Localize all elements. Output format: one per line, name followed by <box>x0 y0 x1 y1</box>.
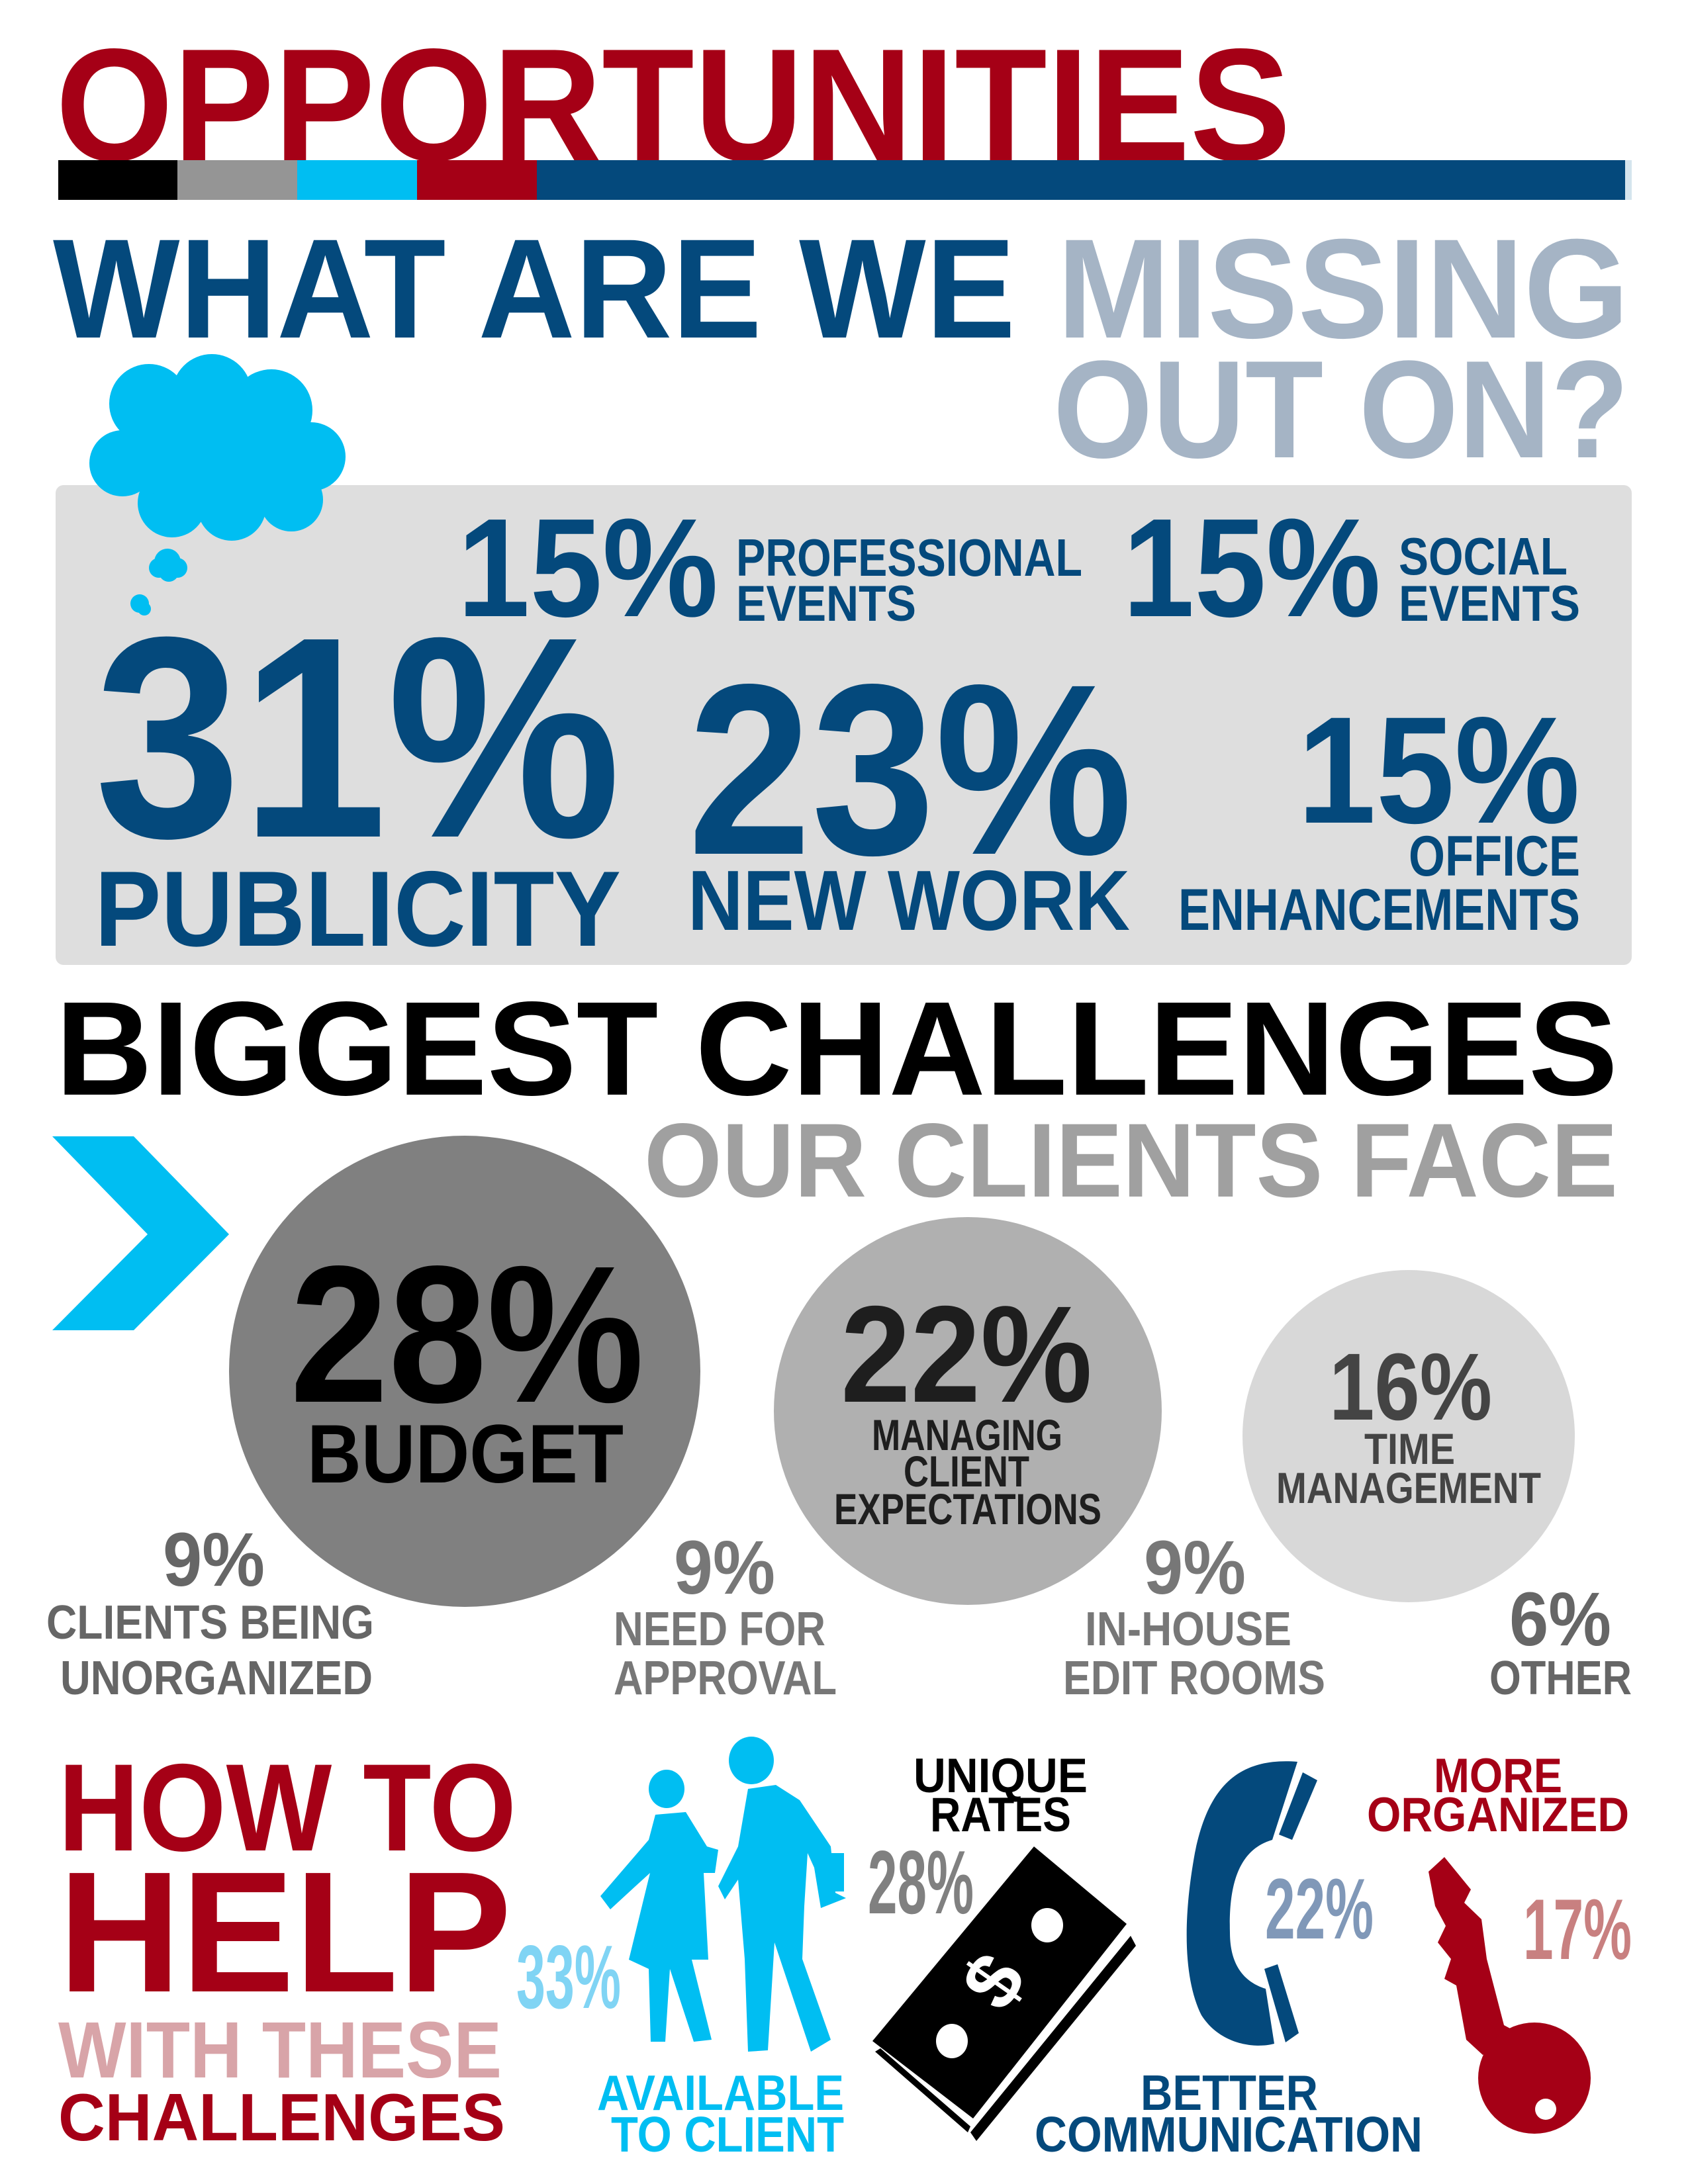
stat: 9% need for approval <box>614 1525 837 1705</box>
stat: 15% office enhancements: OFFICE <box>1409 825 1580 888</box>
stat: 9% need for approval: NEED FOR <box>614 1603 825 1656</box>
stat: 15% social events: SOCIAL <box>1399 527 1568 586</box>
stat: 15% office enhancements: 15% <box>1297 685 1580 855</box>
stat: 15% professional events: 15% <box>457 489 718 646</box>
item: better communication: 22% <box>1265 1860 1374 1957</box>
heading: how to help with these challenges: CHALLENGES <box>58 2081 505 2155</box>
stat: 6% other: OTHER <box>1489 1652 1632 1705</box>
heading: what are we missing out on <box>53 210 1629 487</box>
stat: 9% need for approval: APPROVAL <box>614 1652 837 1705</box>
bubble: 22% managing client expectations: MANAGING <box>872 1410 1062 1459</box>
icon: key <box>1429 1857 1591 2134</box>
bubble: 16% time management: MANAGEMENT <box>1276 1463 1541 1512</box>
stat: 9% in-house edit rooms: EDIT ROOMS <box>1063 1652 1325 1705</box>
stat: 9% clients being unorganized: 9% <box>163 1518 265 1602</box>
stat: 6% other: 6% <box>1509 1577 1611 1662</box>
item: unique rates: 28% <box>868 1832 974 1933</box>
bubble: 28% budget: BUDGET <box>307 1408 624 1500</box>
item: available to client: 33% <box>516 1927 621 2027</box>
bubble: 16% time management <box>1243 1270 1575 1602</box>
heading: what are we missing out on: OUT ON? <box>1053 332 1629 487</box>
stat: 15% social events: 15% <box>1123 489 1381 646</box>
icon: money bill <box>872 1846 1136 2141</box>
icon: people <box>600 1737 846 2052</box>
stat: 9% in-house edit rooms: IN-HOUSE <box>1085 1603 1291 1656</box>
heading: how to help with these challenges: HOW TO <box>58 1738 516 1877</box>
stat: 31% publicity: PUBLICITY <box>95 849 621 969</box>
heading: biggest challenges: OUR CLIENTS FACE <box>644 1101 1618 1219</box>
bubble: 22% managing client expectations <box>774 1217 1162 1605</box>
heading: how to help with these challenges <box>58 1738 516 2155</box>
bubble: 16% time management: 16% <box>1329 1334 1492 1440</box>
stat: 15% office enhancements: ENHANCEMENTS <box>1178 876 1580 942</box>
stat: 9% need for approval: 9% <box>674 1525 775 1610</box>
stat: 15% professional events <box>457 489 1082 646</box>
item: better communication <box>1035 1761 1423 2162</box>
item: unique rates: RATES <box>930 1788 1071 1842</box>
item: unique rates: UNIQUE <box>914 1749 1088 1803</box>
stat: 15% social events: EVENTS <box>1399 576 1580 632</box>
heading: what are we missing out on: WHAT ARE WE <box>53 210 1015 368</box>
heading: how to help with these challenges: HELP <box>58 1837 512 2028</box>
color bar <box>58 160 1632 200</box>
item: better communication: COMMUNICATION <box>1035 2107 1423 2162</box>
heading: what are we missing out on: MISSING <box>1057 210 1629 368</box>
heading: how to help with these challenges: WITH THESE <box>58 2005 502 2095</box>
heading: biggest challenges: BIGGEST CHALLENGES <box>56 974 1618 1123</box>
stat: 9% in-house edit rooms <box>1063 1525 1325 1705</box>
icon: phone <box>1187 1761 1317 2046</box>
stat: 23% new work: NEW WORK <box>688 853 1130 948</box>
stat: 15% professional events: EVENTS <box>736 576 916 632</box>
item: more organized <box>1367 1749 1632 2134</box>
bubble: 22% managing client expectations: 22% <box>841 1278 1092 1432</box>
panel: opportunities stats <box>56 485 1632 969</box>
item: more organized: ORGANIZED <box>1367 1788 1629 1842</box>
item: unique rates <box>868 1749 1136 2141</box>
stat: 9% clients being unorganized <box>46 1518 374 1705</box>
item: available to client: AVAILABLE <box>597 2065 844 2120</box>
icon: chevron arrow <box>52 1136 229 1330</box>
stat: 15% social events <box>1123 489 1580 646</box>
bubble: 22% managing client expectations: CLIENT <box>904 1447 1029 1496</box>
heading: biggest challenges <box>56 974 1618 1219</box>
item: available to client: TO CLIENT <box>611 2107 844 2162</box>
icon: money bill: $ <box>945 1938 1043 2025</box>
item: more organized: MORE <box>1434 1749 1562 1803</box>
bubble: 16% time management: TIME <box>1364 1424 1455 1473</box>
icon: thought cloud <box>89 354 346 615</box>
stat: 9% clients being unorganized: UNORGANIZED <box>60 1652 373 1705</box>
stat: 15% professional events: PROFESSIONAL <box>736 528 1082 587</box>
bubble: 28% budget: 28% <box>290 1225 644 1443</box>
stat: 23% new work: 23% <box>688 633 1133 905</box>
bubble: 28% budget <box>229 1136 700 1607</box>
bubble: 22% managing client expectations: EXPECTATIONS <box>834 1484 1102 1533</box>
item: better communication: BETTER <box>1141 2065 1318 2120</box>
title: opportunities: OPPORTUNITIES <box>56 16 1291 195</box>
stat: 31% publicity: 31% <box>95 577 621 897</box>
stat: 15% office enhancements <box>1178 685 1580 942</box>
stat: 6% other <box>1489 1577 1632 1705</box>
item: available to client <box>516 1737 846 2162</box>
stat: 9% in-house edit rooms: 9% <box>1144 1525 1246 1610</box>
stat: 9% clients being unorganized: CLIENTS BEING <box>46 1596 374 1649</box>
